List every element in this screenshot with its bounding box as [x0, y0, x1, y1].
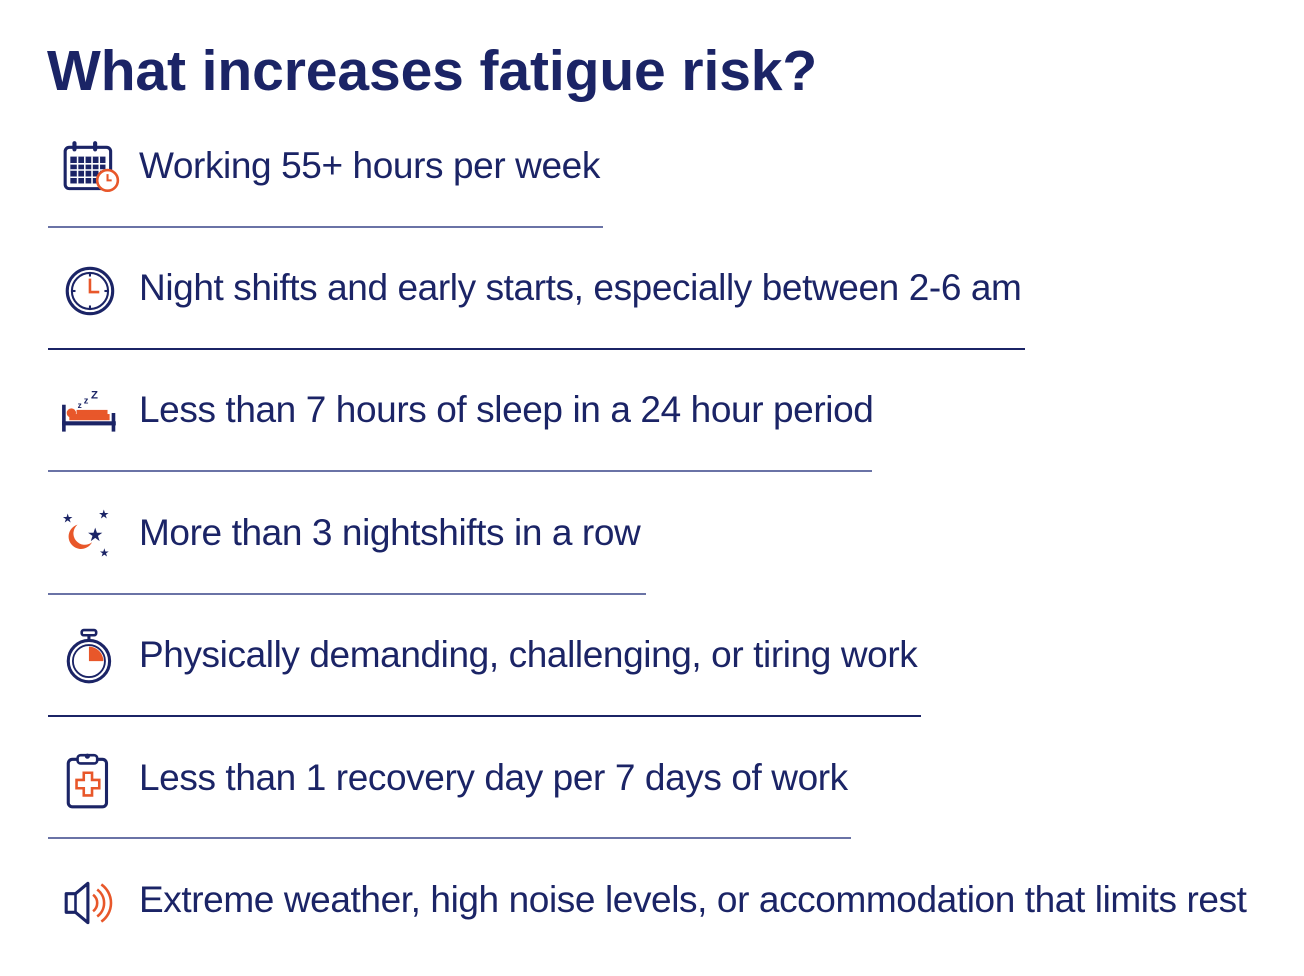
icon: moon and stars: ★	[99, 546, 109, 560]
icon: clock	[66, 266, 114, 316]
row: recovery	[66, 754, 848, 808]
text: Working 55+ hours per week	[139, 145, 600, 186]
text: More than 3 nightshifts in a row	[139, 512, 640, 553]
text: Less than 7 hours of sleep in a 24 hour period	[139, 389, 873, 430]
icon: bed: Z	[91, 390, 98, 402]
icon: speaker	[64, 882, 112, 924]
title: What increases fatigue risk?	[47, 39, 817, 103]
icon: moon and stars: ★	[62, 511, 73, 526]
icon: moon and stars: ★	[87, 525, 104, 546]
icon: bed: z	[78, 401, 82, 410]
row: demanding work	[66, 628, 918, 684]
row: sleep	[62, 389, 873, 432]
text: Less than 1 recovery day per 7 days of work	[139, 757, 848, 798]
row: night shifts	[66, 266, 1021, 316]
icon: bed	[62, 390, 116, 432]
text: Physically demanding, challenging, or tiring work	[139, 634, 917, 675]
icon: moon and stars	[62, 506, 109, 560]
row: environment	[64, 879, 1247, 924]
row: working hours	[64, 141, 600, 192]
text: Extreme weather, high noise levels, or accommodation that limits rest	[139, 879, 1247, 920]
icon: moon and stars: ★	[98, 506, 109, 521]
text: Night shifts and early starts, especially between 2-6 am	[139, 267, 1021, 308]
icon: bed: z	[84, 396, 89, 406]
icon: stopwatch	[66, 628, 112, 684]
icon: calendar	[64, 141, 120, 192]
icon: clipboard	[66, 754, 108, 808]
row: nightshifts	[62, 506, 641, 560]
